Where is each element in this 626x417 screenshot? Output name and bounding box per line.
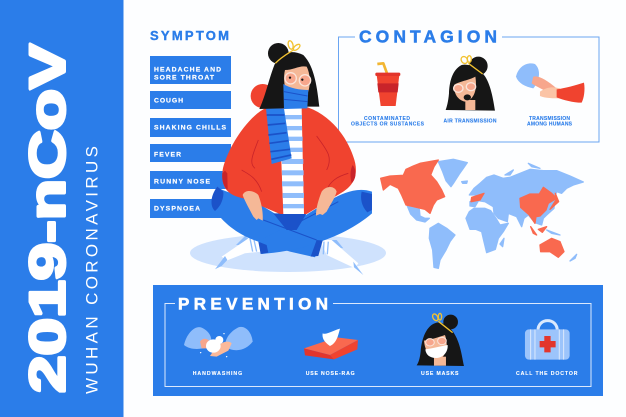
symptom heading: SYMPTOM <box>150 28 230 43</box>
glasses <box>285 73 311 86</box>
hair bow <box>275 40 301 63</box>
prevention heading: PREVENTION <box>178 294 329 313</box>
icon: tissue box <box>304 329 358 359</box>
icon: woman with mask <box>417 313 464 366</box>
contagion frame <box>338 27 599 142</box>
scarf tail <box>266 108 292 164</box>
world map <box>381 159 583 268</box>
symptom list <box>150 56 231 218</box>
label: contaminated objects: OBJECTS OR SUSTANCES <box>351 122 425 128</box>
floor shadow <box>190 234 386 272</box>
symptom list: SORE THROAT <box>154 74 215 82</box>
label: use nose-rag: USE NOSE-RAG <box>306 371 356 377</box>
continents: blue <box>407 159 583 268</box>
symptom list: SHAKING CHILLS <box>154 124 227 132</box>
icon: contaminated cup <box>375 63 400 106</box>
main title: 2019-nCoV <box>20 43 76 393</box>
symptom list: RUNNY NOSE <box>154 179 211 186</box>
legs <box>211 187 372 257</box>
striped shirt <box>281 108 304 214</box>
label: contaminated objects: CONTAMINATED <box>364 116 411 122</box>
label: contaminated objects <box>351 116 425 128</box>
label: air transmission: AIR TRANSMISSION <box>444 119 498 125</box>
label: transmission among humans: AMONG HUMANS <box>527 122 573 128</box>
feet <box>215 236 363 275</box>
label: transmission among humans: TRANSMISSION <box>529 116 571 122</box>
hands <box>243 187 337 221</box>
woman illustration <box>211 40 372 275</box>
symptom list: FEVER <box>154 152 182 158</box>
subtitle: WUHAN CORONAVIRUS <box>82 146 102 394</box>
label: use masks: USE MASKS <box>421 371 460 377</box>
countries: red <box>381 160 564 257</box>
contagion heading: CONTAGION <box>359 27 498 47</box>
icon: handwashing <box>184 327 253 357</box>
sidebar panel <box>0 0 124 417</box>
symptom list: HEADACHE AND <box>154 67 222 74</box>
label: transmission among humans <box>527 116 573 128</box>
label: call the doctor: CALL THE DOCTOR <box>516 371 578 377</box>
label: handwashing: HANDWASHING <box>193 371 243 377</box>
hair and bun <box>259 43 319 109</box>
hood <box>251 84 275 108</box>
icon: hands touching <box>516 63 585 103</box>
icon: first aid case <box>525 321 570 360</box>
eyes <box>289 76 291 79</box>
face <box>284 66 310 95</box>
icon: coughing woman <box>446 55 495 111</box>
jacket <box>222 106 356 214</box>
prevention panel <box>153 285 603 396</box>
symptom list: DYSPNOEA <box>154 206 201 213</box>
symptom list: COUGH <box>154 98 184 104</box>
scarf mask <box>283 84 308 109</box>
